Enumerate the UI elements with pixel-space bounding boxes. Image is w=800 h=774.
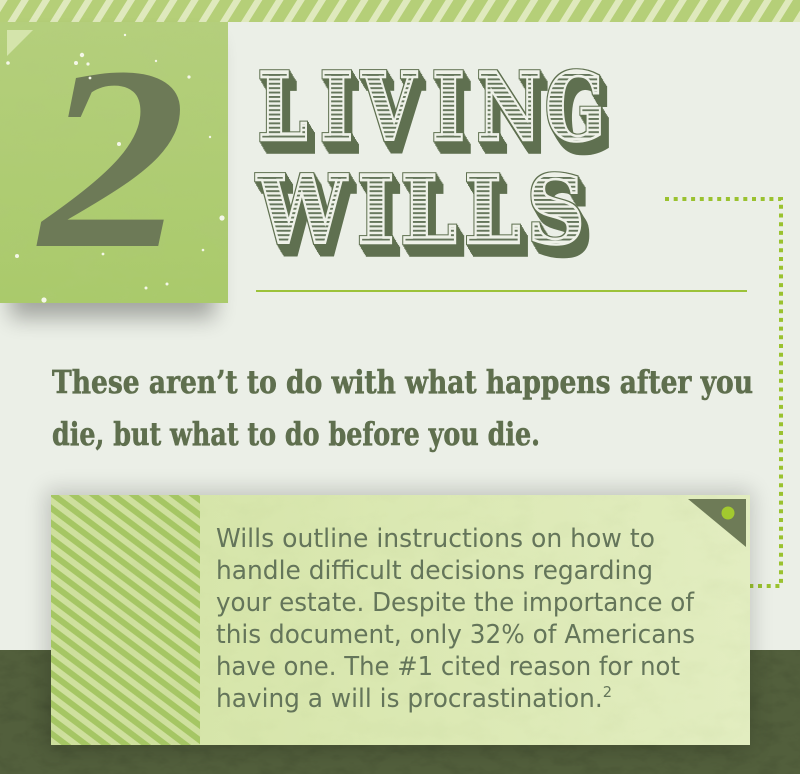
intro heading: die, but what to do before you die. (52, 415, 540, 453)
card text: having a will is procrastination. (216, 684, 614, 714)
intro heading (52, 363, 753, 453)
card text: this document, only 32% of Americans (216, 620, 695, 650)
title line 2: WILLS (256, 155, 585, 266)
bottom dark band (0, 650, 800, 774)
striped card panel (51, 495, 200, 745)
title: Living Wills (256, 52, 605, 266)
card text: your estate. Despite the importance of (216, 588, 695, 618)
dotted connector (665, 199, 781, 586)
card text: 2 (603, 683, 612, 701)
card text: Wills outline instructions on how to (216, 524, 655, 554)
title line 1: LIVING (258, 52, 605, 163)
card text: handle difficult decisions regarding (216, 556, 653, 586)
card text: have one. The #1 cited reason for not (216, 652, 680, 682)
number 2: 2 (35, 13, 187, 303)
info card (46, 490, 752, 750)
paper specks (6, 34, 225, 303)
divider under title (256, 290, 747, 292)
top striped band (0, 0, 800, 22)
icon: corner tab (688, 499, 746, 547)
icon: corner triangle (7, 30, 33, 56)
number panel (0, 13, 228, 318)
card text (216, 524, 695, 714)
